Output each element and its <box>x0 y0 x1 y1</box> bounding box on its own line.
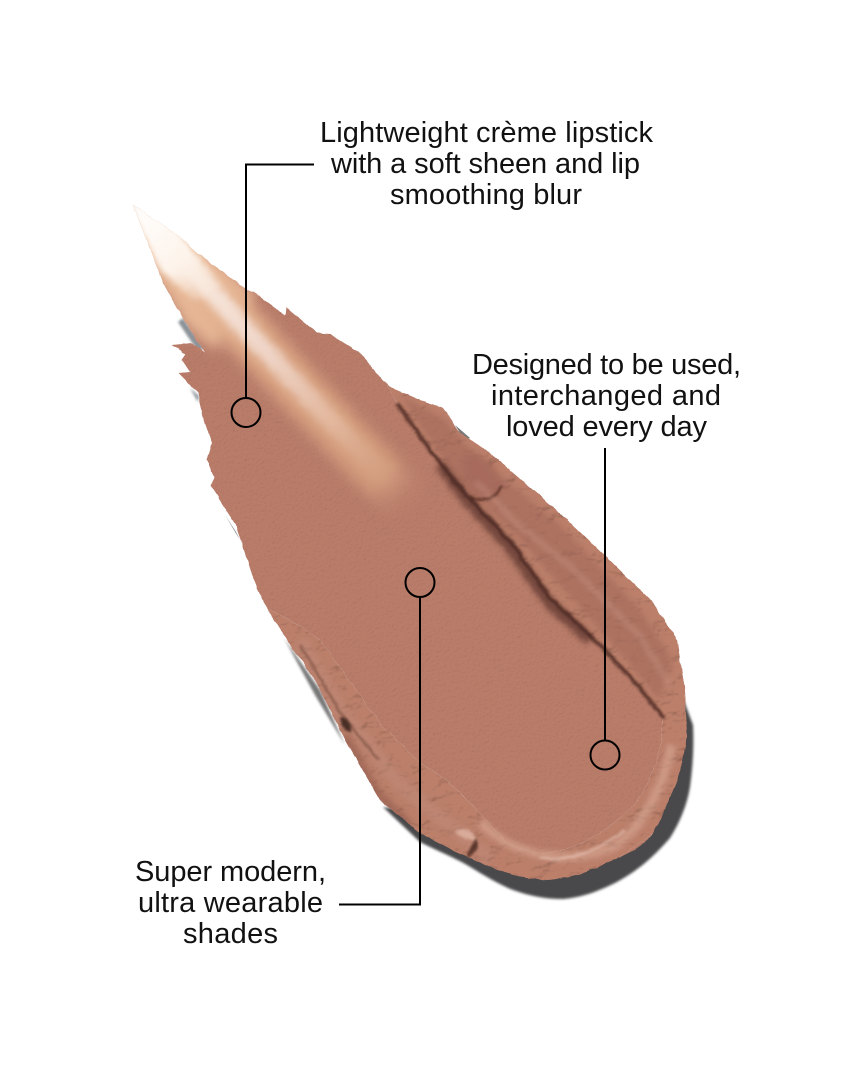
callout: designed to be used <box>472 349 741 770</box>
text: super modern: Super modern, <box>135 856 326 888</box>
leader line: super modern <box>339 597 420 904</box>
lump near lower edge <box>455 830 477 842</box>
callout: lightweight crème lipstick <box>232 117 654 427</box>
text: designed: Designed to be used, <box>472 349 741 381</box>
lower rim gloss <box>480 745 672 857</box>
leader line: designed <box>604 448 606 740</box>
raised ridge: upper right and rim <box>270 378 700 900</box>
text: lightweight: with a soft sheen and lip <box>330 148 640 180</box>
peach tip wash <box>146 240 258 352</box>
text: super modern: ultra wearable <box>138 887 323 919</box>
text: lightweight <box>320 117 654 211</box>
marker: super modern <box>406 568 434 597</box>
callout: super modern shades <box>135 568 434 950</box>
marker: lightweight <box>232 398 260 427</box>
marker: designed <box>590 740 620 770</box>
text: designed <box>472 349 741 443</box>
flat lipstick base <box>120 190 700 890</box>
text: lightweight: Lightweight crème lipstick <box>320 117 654 149</box>
text: designed: interchanged and <box>491 380 721 412</box>
text: designed: loved every day <box>506 411 708 443</box>
text: lightweight: smoothing blur <box>390 179 582 211</box>
washed-out swatch tip <box>133 205 220 300</box>
peach sheen band <box>150 222 408 503</box>
lipstick swatch <box>120 190 700 900</box>
ridge darker body <box>400 395 672 700</box>
text: super modern <box>135 856 326 950</box>
dark crease <box>397 403 664 718</box>
drop shadow <box>178 318 693 899</box>
pale sheen core <box>152 218 372 464</box>
blob on ridge <box>476 456 495 474</box>
ridge highlights <box>476 482 670 686</box>
text: super modern: shades <box>183 918 278 950</box>
leader line: lightweight <box>246 164 314 398</box>
lower left ridge <box>300 640 490 860</box>
